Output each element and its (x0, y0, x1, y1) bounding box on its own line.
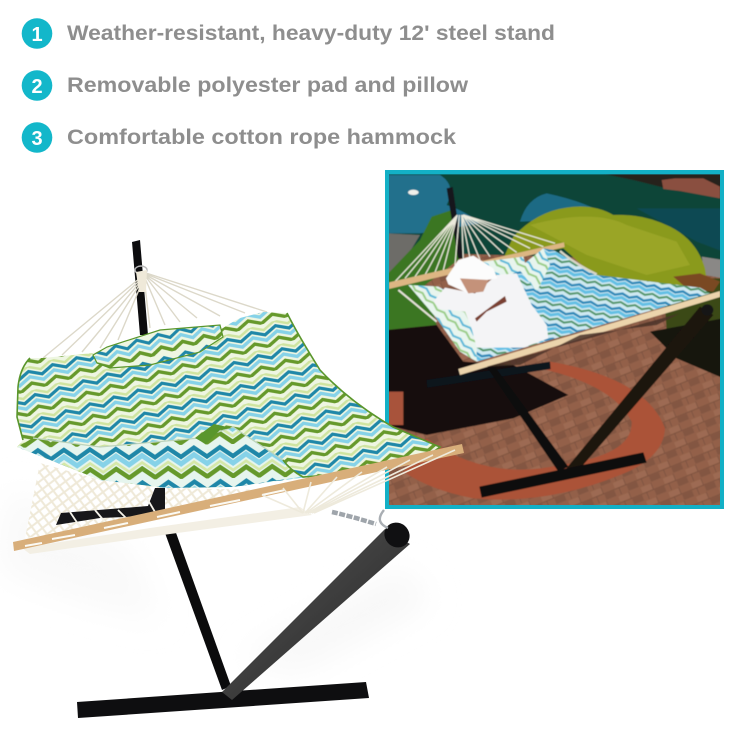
ground shadow (387, 325, 568, 435)
pole cap (379, 517, 415, 553)
spreader slots (25, 490, 285, 546)
floor shadows (0, 490, 430, 670)
chain and hook (332, 510, 388, 528)
pond (387, 172, 723, 262)
feature 3: Comfortable cotton rope hammock (67, 125, 456, 149)
rope bed net (25, 463, 265, 538)
rope bundle (22, 507, 312, 554)
spreader strings back (395, 215, 555, 282)
pad and fold (16, 312, 442, 488)
feature list (22, 18, 555, 153)
stand back bar (427, 362, 551, 388)
dark foliage behind right end (664, 278, 720, 330)
front spreader bar (13, 444, 464, 551)
pad piping (283, 313, 440, 477)
lifestyle photo panel (385, 170, 724, 509)
feature 2 (22, 70, 468, 101)
photo frame (385, 170, 724, 509)
feature 1 (22, 18, 555, 49)
feature 2: Removable polyester pad and pillow (67, 73, 468, 97)
stand base bar (77, 682, 369, 718)
green tie (195, 424, 232, 444)
front spreader bar (458, 291, 720, 375)
right rope (560, 251, 597, 274)
left hedge (387, 210, 460, 330)
feature 3 (22, 122, 456, 153)
feature 3: 3 (31, 128, 43, 150)
red brick ring (403, 362, 665, 500)
lower fold (17, 427, 300, 488)
stand base (479, 452, 647, 498)
stand poles (488, 367, 568, 472)
yellow-green bush (503, 206, 708, 290)
rear suspension ropes (43, 273, 267, 358)
black stand seen through net (56, 488, 165, 525)
feature 2: 2 (31, 76, 43, 98)
thick stand pole (222, 529, 410, 700)
front suspension ropes (262, 450, 455, 513)
brick patio (389, 253, 720, 505)
back pole (447, 187, 463, 258)
rear spreader bar (389, 242, 565, 289)
hook ring (135, 266, 147, 274)
feature 1: Weather-resistant, heavy-duty 12' steel stand (67, 21, 555, 45)
thin stand pole (165, 530, 231, 690)
main hammock product (0, 240, 470, 718)
feature 1: 1 (31, 24, 43, 46)
stand back pole (132, 240, 148, 335)
pad in photo (408, 248, 710, 362)
pillow (93, 325, 223, 368)
road (387, 233, 420, 272)
woman in white (433, 256, 548, 348)
